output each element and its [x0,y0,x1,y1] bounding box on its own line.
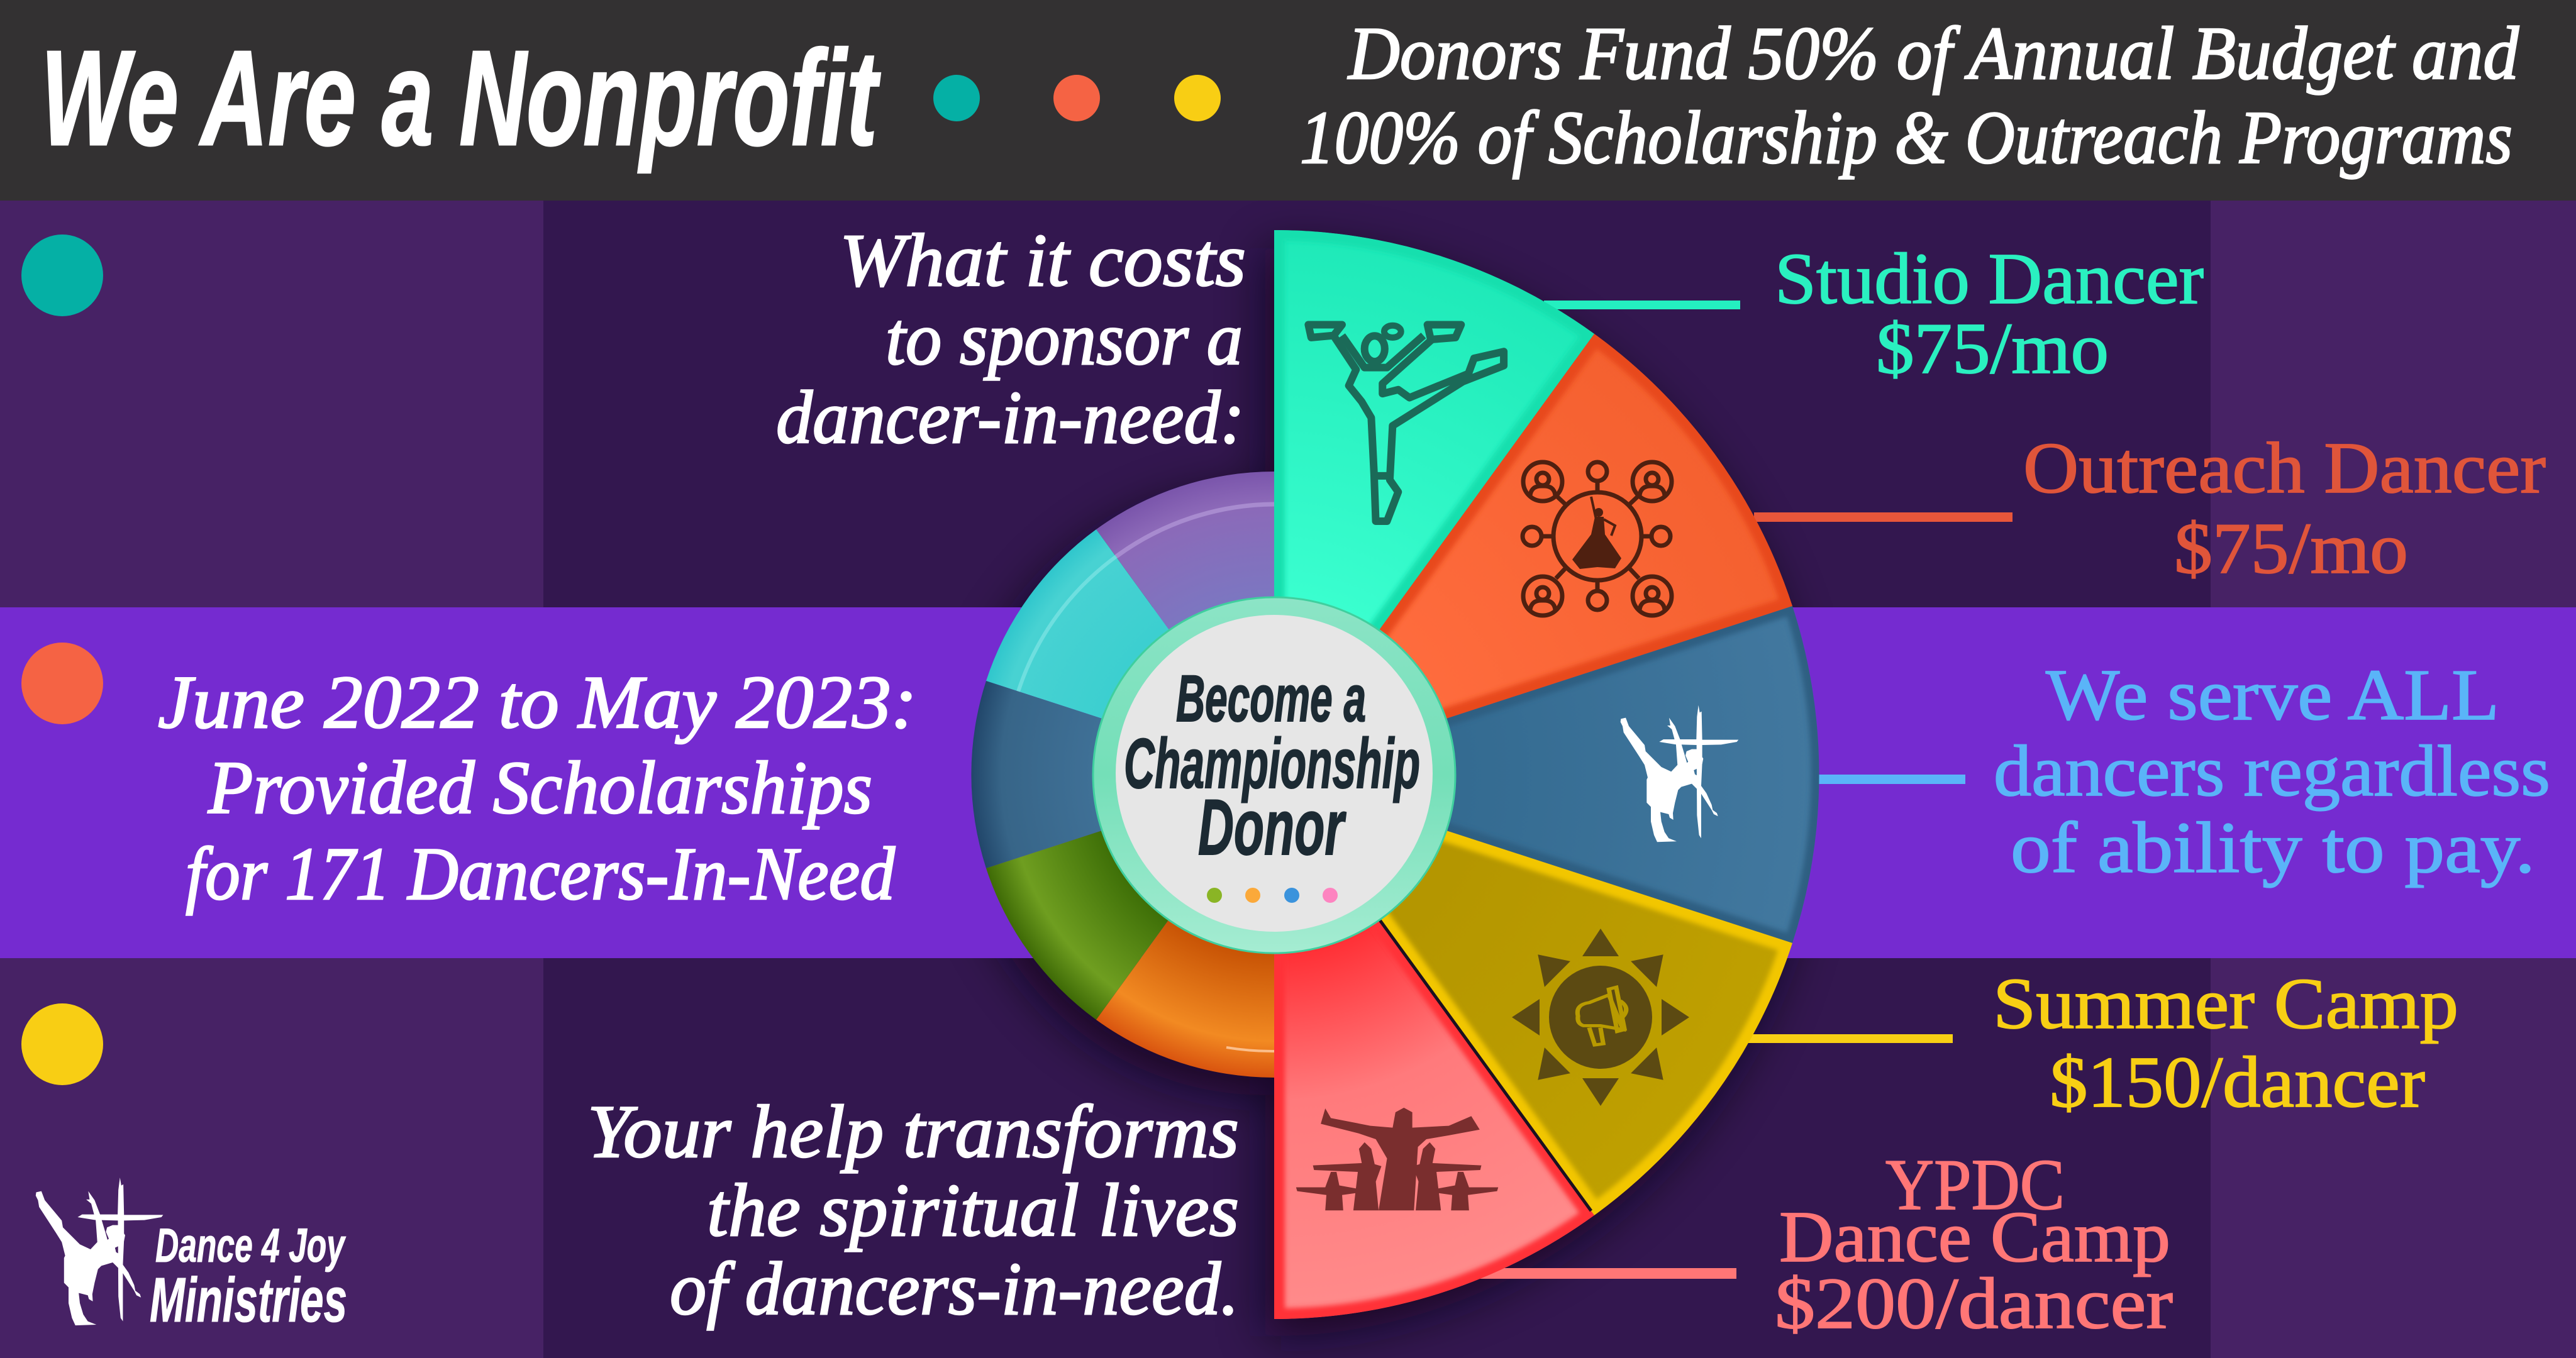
header bar [0,0,2576,201]
text: scholarships provided: June 2022 to May 2023: [158,660,917,744]
label: studio dancer: Studio Dancer [1775,239,2204,319]
wheel drop shadow [962,248,1810,1337]
logo [36,1178,347,1335]
left column dots [21,235,103,1085]
label: we serve all: of ability to pay. [2011,808,2535,888]
text: spiritual lives: Your help transforms [587,1090,1239,1173]
label: YPDC dance camp: YPDC [1885,1145,2065,1225]
inner disc: purple slice [1096,472,1274,775]
label: YPDC dance camp: Dance Camp [1779,1197,2170,1278]
label: studio dancer [1775,239,2204,389]
badge text: Championship [1124,724,1420,803]
icon: group of dancers [1296,1108,1498,1210]
header tagline: Donors Fund 50% of Annual Budget and [1347,11,2519,95]
badge face [1116,615,1433,932]
logo name: Dance 4 Joy [155,1219,347,1272]
inner disc: green slice [986,775,1274,1020]
label: YPDC dance camp [1775,1145,2173,1344]
wheel [971,230,1819,1319]
label: we serve all: We serve ALL [2046,655,2499,736]
inner disc: orange slice [1096,775,1274,1078]
slice: outreach dancer [1380,334,1792,718]
slice: studio dancer [1274,230,1594,629]
header dots [933,75,1221,121]
label: summer camp: Summer Camp [1993,964,2458,1044]
header tagline [1300,11,2519,179]
text: sponsor cost: What it costs [840,218,1246,302]
leader lines [1471,301,2012,1279]
text: scholarships provided: Provided Scholarships [208,746,872,829]
text: scholarships provided [158,660,917,915]
left column band [0,201,543,1358]
badge dots [1207,888,1338,903]
inner disc: blue slice [971,681,1274,868]
badge ring [1093,597,1455,953]
logo name [150,1219,347,1335]
right column band [2211,201,2576,1358]
text: scholarships provided: for 171 Dancers-In-Need [186,832,896,915]
label: studio dancer: $75/mo [1876,309,2109,389]
text: spiritual lives [587,1090,1239,1330]
icon: outreach network [1523,462,1672,616]
label: outreach dancer: Outreach Dancer [2023,428,2546,509]
inner disc: cyan slice [986,529,1274,775]
icon: sun with megaphone [1512,929,1689,1106]
icon: ballet dancer [1308,324,1504,521]
purple centre band [0,607,2576,958]
logo dancer and cross [36,1178,163,1325]
label: we serve all [1994,655,2550,888]
label: summer camp [1993,964,2458,1123]
text: sponsor cost: dancer-in-need: [776,375,1245,459]
slice separator [1377,917,1591,1211]
text: spiritual lives: the spiritual lives [707,1168,1239,1252]
badge text: Become a [1176,662,1366,736]
slice: summer camp [1381,831,1792,1215]
label: outreach dancer [2023,428,2546,589]
text: sponsor cost [776,218,1246,459]
text: sponsor cost: to sponsor a [886,297,1243,380]
label: YPDC dance camp: $200/dancer [1775,1264,2173,1344]
logo name: Ministries [150,1265,347,1335]
centre badge [1093,597,1455,953]
slice: YPDC dance camp [1274,922,1594,1319]
badge text: Donor [1198,784,1346,871]
icon: dancer and cross [1621,705,1738,842]
slice: blue, all dancers [1446,606,1819,943]
badge text [1124,662,1420,871]
label: outreach dancer: $75/mo [2174,509,2408,589]
title: We Are a Nonprofit [41,22,880,174]
label: we serve all: dancers regardless [1994,731,2550,812]
label: summer camp: $150/dancer [2050,1042,2425,1123]
text: spiritual lives: of dancers-in-need. [670,1247,1239,1330]
